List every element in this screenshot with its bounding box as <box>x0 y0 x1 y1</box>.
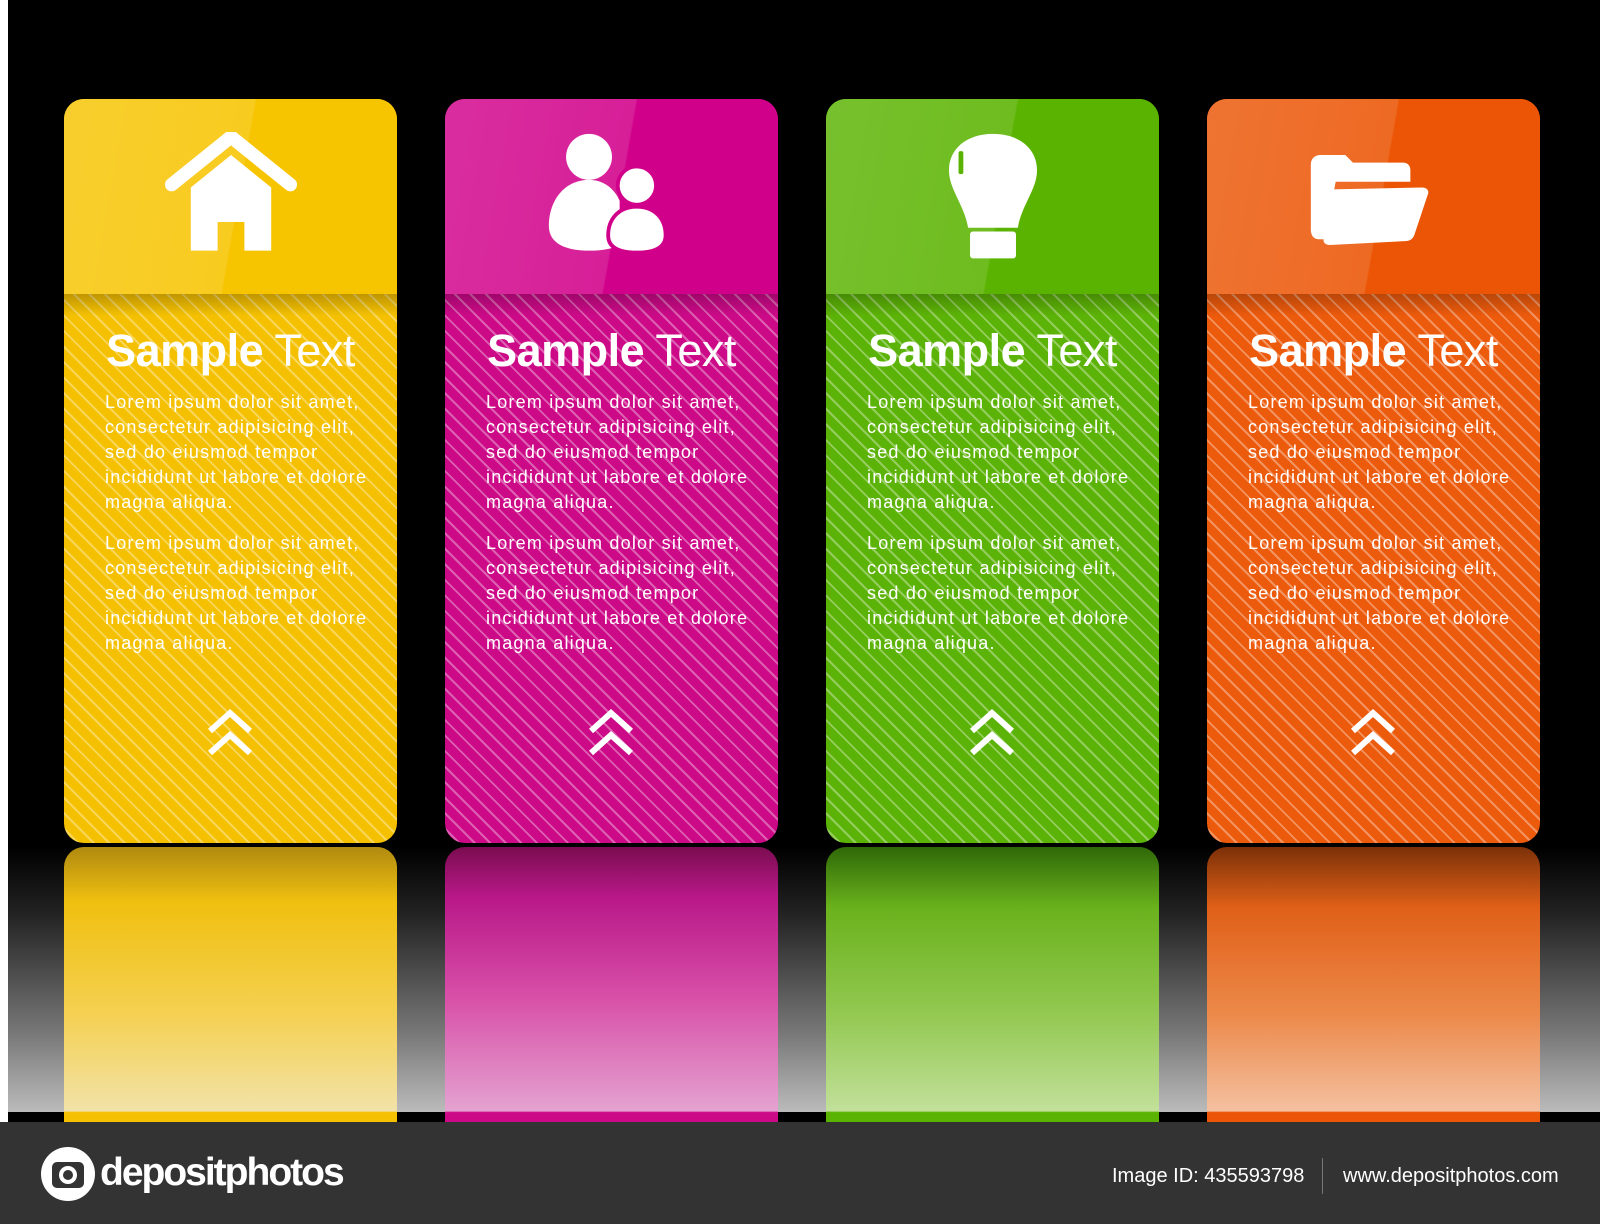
icon: light bulb <box>948 134 1038 258</box>
reflection: yellow <box>64 847 397 1122</box>
panel: yellow home card <box>64 99 397 843</box>
text block: incididunt ut labore et dolore <box>105 608 367 628</box>
text block: Lorem ipsum dolor sit amet, <box>105 392 359 412</box>
text block: magna aliqua. <box>105 492 234 512</box>
text block: magna aliqua. <box>105 633 234 653</box>
text block: sed do eiusmod tempor <box>486 442 699 462</box>
panel: orange folder card <box>1207 99 1540 843</box>
text block: sed do eiusmod tempor <box>867 442 1080 462</box>
text block: incididunt ut labore et dolore <box>1248 608 1510 628</box>
text block: incididunt ut labore et dolore <box>486 467 748 487</box>
text block: magna aliqua. <box>1248 492 1377 512</box>
text block: magna aliqua. <box>486 492 615 512</box>
text block: Lorem ipsum dolor sit amet, <box>486 533 740 553</box>
text block: Lorem ipsum dolor sit amet, <box>867 392 1121 412</box>
text block: sed do eiusmod tempor <box>1248 583 1461 603</box>
text block: sed do eiusmod tempor <box>867 583 1080 603</box>
text block: incididunt ut labore et dolore <box>1248 467 1510 487</box>
icon: chevron up <box>208 709 252 756</box>
text block: Lorem ipsum dolor sit amet, <box>486 392 740 412</box>
image id text: Image ID: 435593798 <box>1112 1165 1304 1187</box>
website url: www.depositphotos.com <box>1343 1165 1559 1187</box>
text block: magna aliqua. <box>867 633 996 653</box>
reflection: pink <box>445 847 778 1122</box>
text block: consectetur adipisicing elit, <box>1248 417 1498 437</box>
panel: pink people card <box>445 99 778 843</box>
text block: consectetur adipisicing elit, <box>1248 558 1498 578</box>
text block: incididunt ut labore et dolore <box>105 467 367 487</box>
text block: Lorem ipsum dolor sit amet, <box>105 533 359 553</box>
text block: incididunt ut labore et dolore <box>867 608 1129 628</box>
logo: depositphotos <box>41 1147 344 1201</box>
logo: depositphotos: depositphotos <box>100 1151 343 1194</box>
heading: Sample Text <box>868 325 1117 376</box>
text block <box>1248 392 1510 653</box>
footer bar <box>0 1122 1600 1224</box>
text block: magna aliqua. <box>486 633 615 653</box>
heading: Sample Text <box>106 325 355 376</box>
text block: consectetur adipisicing elit, <box>105 558 355 578</box>
text block: magna aliqua. <box>1248 633 1377 653</box>
text block: sed do eiusmod tempor <box>105 442 318 462</box>
text block: incididunt ut labore et dolore <box>867 467 1129 487</box>
text block <box>486 392 748 653</box>
text block <box>105 392 367 653</box>
heading: Sample Text <box>1249 325 1498 376</box>
text block: Lorem ipsum dolor sit amet, <box>1248 392 1502 412</box>
heading: Sample Text <box>487 325 736 376</box>
text block: consectetur adipisicing elit, <box>867 417 1117 437</box>
reflection: orange <box>1207 847 1540 1122</box>
text block: sed do eiusmod tempor <box>105 583 318 603</box>
text block: consectetur adipisicing elit, <box>867 558 1117 578</box>
text block: sed do eiusmod tempor <box>486 583 699 603</box>
text block: Lorem ipsum dolor sit amet, <box>1248 533 1502 553</box>
icon: people <box>548 134 664 251</box>
text block: sed do eiusmod tempor <box>1248 442 1461 462</box>
text block: consectetur adipisicing elit, <box>486 417 736 437</box>
icon: house <box>164 132 298 251</box>
icon: folder <box>1310 155 1428 245</box>
text block: consectetur adipisicing elit, <box>486 558 736 578</box>
text block: magna aliqua. <box>867 492 996 512</box>
text block: incididunt ut labore et dolore <box>486 608 748 628</box>
reflection: green <box>826 847 1159 1122</box>
panel: green bulb card <box>826 99 1159 843</box>
icon: chevron up <box>1351 709 1395 756</box>
text block: Lorem ipsum dolor sit amet, <box>867 533 1121 553</box>
icon: chevron up <box>589 709 633 756</box>
text block: consectetur adipisicing elit, <box>105 417 355 437</box>
icon: chevron up <box>970 709 1014 756</box>
text block <box>867 392 1129 653</box>
